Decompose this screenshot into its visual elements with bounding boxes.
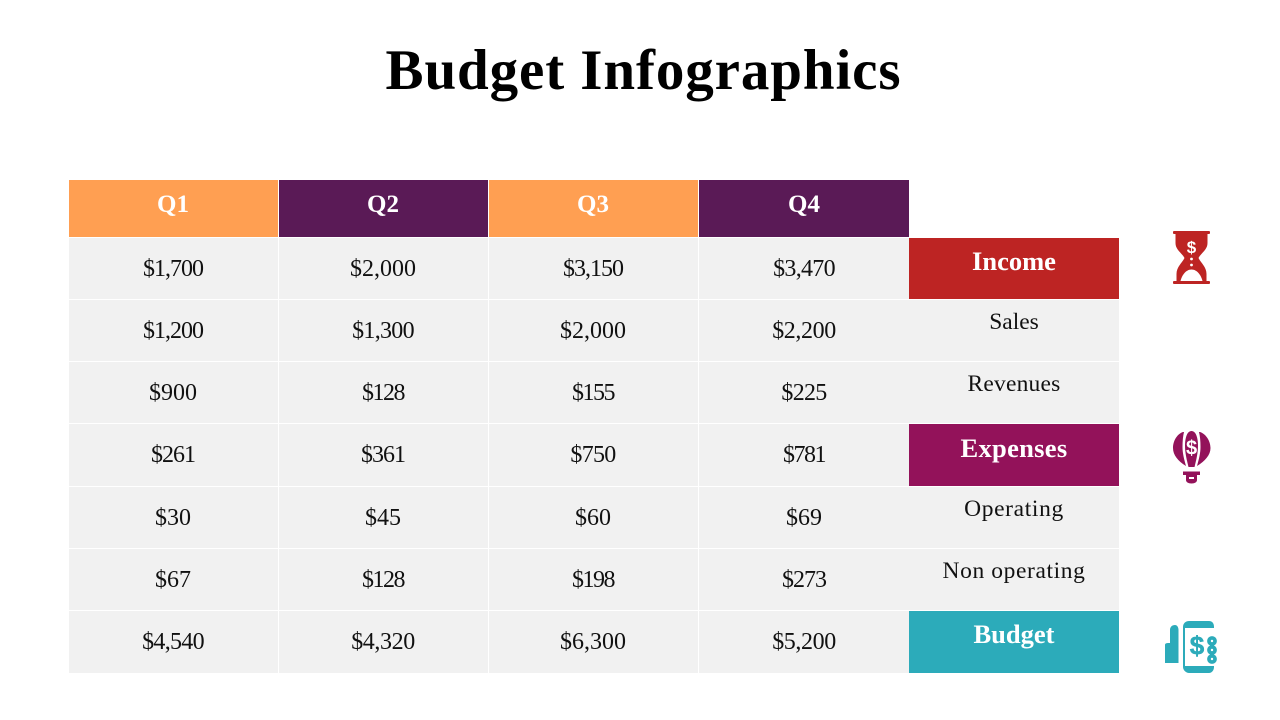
row 2: sales: $2,000: [560, 318, 626, 344]
row 6: non operating: $198: [572, 567, 614, 593]
row 5: operating: $30: [155, 505, 191, 531]
row 3: revenues: Revenues: [968, 371, 1060, 397]
header row: quarters: [69, 180, 909, 237]
row 4: expenses: [69, 424, 1119, 486]
row 2: sales: [69, 300, 1119, 361]
row 2: sales: $2,200: [772, 318, 836, 344]
row 4: expenses: $781: [783, 442, 825, 468]
row 1: income: $3,150: [563, 256, 623, 282]
icon: hand holding phone with dollar: [1165, 621, 1217, 673]
row 3: revenues: $155: [572, 380, 614, 406]
row 2: sales: $1,200: [143, 318, 203, 344]
icon: hourglass with dollar: [1173, 231, 1210, 284]
row 3: revenues: [69, 362, 1119, 423]
row 7: budget: Budget: [974, 619, 1054, 649]
icon: hourglass with dollar: $: [1187, 238, 1197, 257]
row 2: sales: $1,300: [352, 318, 414, 344]
row 3: revenues: $128: [362, 380, 404, 406]
row 7: budget: $4,540: [142, 629, 204, 655]
icon: hand holding phone with dollar: $: [1190, 630, 1205, 660]
header row: quarters: Q3: [577, 191, 609, 218]
row 5: operating: Operating: [964, 496, 1064, 522]
row 6: non operating: Non operating: [943, 558, 1085, 584]
header row: quarters: Q1: [157, 191, 189, 218]
row 3: revenues: $900: [149, 380, 197, 406]
row 5: operating: [69, 487, 1119, 548]
row 7: budget: $6,300: [560, 629, 626, 655]
row 1: income: Income: [972, 246, 1056, 276]
row 4: expenses: $261: [151, 442, 195, 468]
row 4: expenses: $361: [361, 442, 405, 468]
row 7: budget: $4,320: [351, 629, 415, 655]
row 7: budget: $5,200: [772, 629, 836, 655]
row 3: revenues: $225: [781, 380, 827, 406]
row 1: income: [69, 238, 1119, 299]
row 6: non operating: $67: [155, 567, 191, 593]
row 6: non operating: $273: [782, 567, 826, 593]
row 1: income: $2,000: [350, 256, 416, 282]
row 2: sales: Sales: [989, 309, 1039, 335]
row 4: expenses: $750: [570, 442, 616, 468]
header row: quarters: Q4: [788, 191, 820, 218]
row 1: income: $3,470: [773, 256, 835, 282]
icon: hot air balloon with dollar: $: [1186, 438, 1197, 460]
row 6: non operating: $128: [362, 567, 404, 593]
row 6: non operating: [69, 549, 1119, 610]
row 5: operating: $45: [365, 505, 401, 531]
row 1: income: $1,700: [143, 256, 203, 282]
budget table: [69, 180, 1119, 673]
row 4: expenses: Expenses: [961, 433, 1067, 463]
row 5: operating: $60: [575, 505, 611, 531]
title: Budget Infographics: [386, 39, 901, 102]
row 5: operating: $69: [786, 505, 822, 531]
row 7: budget: [69, 611, 1119, 673]
header row: quarters: Q2: [367, 191, 399, 218]
icon: hot air balloon with dollar: [1173, 431, 1210, 484]
